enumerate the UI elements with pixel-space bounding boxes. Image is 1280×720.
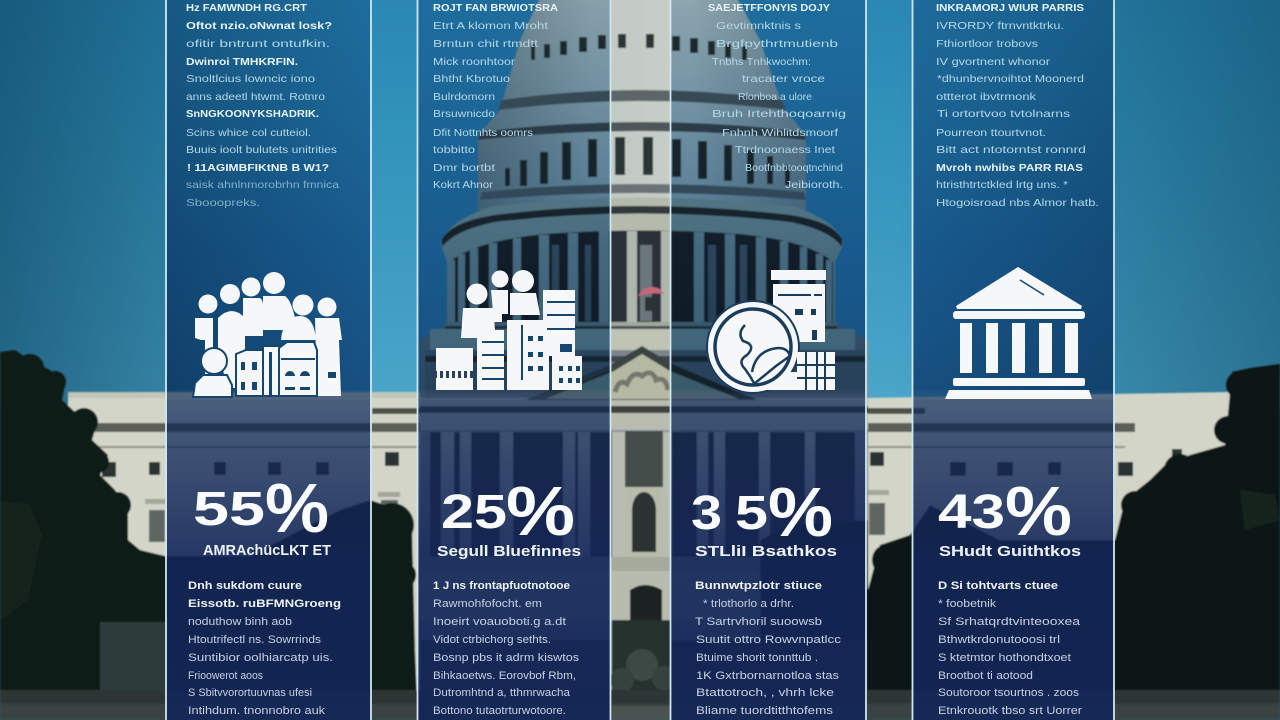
detail text block 1: S Sbitvvorortuuvnas ufesi [188,687,312,699]
statistic: 43%: 43 [938,486,1005,539]
intro text block 1: Snoltlcius lowncic iono [186,73,315,85]
detail text block 4: D Si tohtvarts ctuee [938,580,1058,592]
central block [420,325,868,720]
statistic: 55% [193,469,329,547]
intro text block 1: Dwinroi TMHKRFIN. [186,56,298,68]
intro text block 1: ofitir bntrunt ontufkin. [186,38,330,50]
intro text block 4: Htogoisroad nbs Almor hatb. [936,197,1099,209]
intro text block 3: Ttrdnoonaess Inet [735,144,835,156]
detail text block 2: Inoeirt voauoboti.g a.dt [433,616,566,628]
intro text block 1: Scins whice col cutteiol. [186,127,311,139]
intro text block 1: anns adeetl htwmt. Rotnro [186,91,325,103]
detail text block 2: Vidot ctrbichorg sethts. [433,634,551,646]
detail text block 3: Bunnwtpzlotr stiuce [695,580,822,592]
category label: first column: AMRAchücLKT ET [203,542,331,559]
detail text block 2: Rawmohfofocht. em [433,598,542,610]
intro text block 1: saisk ahnlnmorobrhn fmnica [186,179,339,191]
intro text block 1: Hz FAMWNDH RG.CRT [186,2,308,14]
category label: fourth column: SHudt Guithtkos [939,543,1081,560]
intro text block 2: tobbitto [433,144,475,156]
category label: third column: STLliI Bsathkos [695,543,837,560]
detail text block 4: Etnkrouotk tbso srt Uorrer [938,705,1082,717]
detail text block 3: Suutit ottro Rowvnpatlcc [696,634,842,646]
detail text block 3: Btattotroch, , vhrh lcke [696,687,834,699]
detail text block 2: Bihkaoetws. Eorovbof Rbm, [433,670,576,682]
detail text block 4: Brootbot ti aotood [938,670,1033,682]
intro text block 4 [936,2,1099,209]
intro text block 4: Mvroh nwhibs PARR RIAS [936,162,1083,174]
intro text block 3: Tnbhs Tnhkwochm: [712,56,811,68]
intro text block 1: SnNGKOONYKSHADRIK. [186,108,319,120]
detail text block 2: 1 J ns frontapfuotnotooe [433,580,570,592]
intro text block 2: Bhtht Kbrotuo [433,73,510,85]
intro text block 3: Brgfpythrtmutienb [716,38,838,50]
detail text block 4: Sf Srhatqrdtvinteooxea [938,616,1081,628]
panel: second column, 25% small business [418,0,610,720]
intro text block 4: Fthiortloor trobovs [936,38,1038,50]
icon: dollar coin with office building [707,270,835,393]
intro text block 3: Jeibioroth. [785,179,843,191]
detail text block 1: Htoutrifectl ns. Sowrrinds [188,634,322,646]
statistic: 35% [691,473,833,551]
intro text block 4: htristhtrtctkled lrtg uns. * [936,179,1068,191]
intro text block 3: tracater vroce [742,73,825,85]
detail text block 3 [695,580,842,717]
intro text block 3 [708,2,846,191]
intro text block 1: Buuis ioolt bulutets unitrities [186,144,337,156]
intro text block 2: Kokrt Ahnor [433,179,494,191]
detail text block 3: Bliame tuordtitthtofems [696,705,834,717]
intro text block 3: SAEJETFFONYIS DOJY [708,2,830,14]
detail text block 1 [188,580,341,717]
intro text block 3: Gevtimnktnis s [716,20,801,32]
intro text block 1 [186,2,339,209]
intro text block 4: INKRAMORJ WIUR PARRIS [936,2,1084,14]
dome [478,0,806,210]
intro text block 4: Bitt act ntotorntst ronnrd [936,144,1086,156]
icon: people and buildings [193,272,342,397]
detail text block 4: * foobetnik [938,598,997,610]
detail text block 2: Bosnp pbs it adrm kiswtos [433,652,580,664]
detail text block 1: Eissotb. ruBFMNGroeng [188,598,341,610]
intro text block 2: Brsuwnicdo [433,108,495,120]
detail text block 1: Frioowerot aoos [188,670,263,682]
detail text block 4: Soutoroor tsourtnos . zoos [938,687,1080,699]
statistic: 25% [441,472,575,550]
intro text block 4: *dhunbervnoihtot Moonerd [937,73,1084,85]
detail text block 1: Suntibior oolhiarcatp uis. [188,652,333,664]
category label: second column: Segull Bluefinnes [437,543,581,560]
panel: fourth column, 43% student [912,0,1114,720]
statistic: 35%: 5 [735,487,768,540]
detail text block 4: Bthwtkrdonutooosi trl [938,634,1060,646]
statistic: 25%: 25 [441,486,507,539]
pediment [526,346,758,400]
flag [638,287,664,296]
intro text block 2 [433,2,558,191]
detail text block 1: Intihdum. tnonnobro auk [188,705,326,717]
center shrubs and steps [612,620,672,706]
statistic: 43%: % [1005,472,1072,550]
detail text block 3: Btuime shorit tonnttub . [696,652,818,664]
statistic: 35%: % [768,473,833,551]
intro text block 1: Sbooopreks. [186,197,260,209]
detail text block 2: Bottono tutaotrturwotoore. [433,705,566,717]
detail text block 4 [938,580,1082,717]
statistic: 43% [938,472,1072,550]
intro text block 3: Bootfnbbtooqtnchind [745,162,843,174]
detail text block 4: S ktetmtor hothondtxoet [938,652,1071,664]
statistic: 25%: % [506,472,575,550]
icon: classical government building [945,267,1092,399]
wings [68,398,420,720]
intro text block 2: Etrt A klomon Mroht [433,20,548,32]
detail text block 2: Dutromhtnd a, tthmrwacha [433,687,571,699]
intro text block 2: Bulrdomorn [433,91,495,103]
intro text block 2: Dfit Nottnhts oomrs [433,127,533,139]
intro text block 2: ROJT FAN BRWIOTSRA [433,2,558,14]
detail text block 2 [433,580,580,717]
intro text block 4: Pourreon ttourtvnot. [936,127,1046,139]
intro text block 4: IVRORDY ftrnvntktrku. [936,20,1064,32]
detail text block 1: noduthow binh aob [188,616,292,628]
intro text block 4: ottterot ibvtrmonk [936,91,1037,103]
detail text block 1: Dnh sukdom cuure [188,580,302,592]
statistic: 55%: % [265,469,329,547]
detail text block 3: T Sartrvhoril suoowsb [695,616,822,628]
intro text block 3: Rlonboa a ulore [738,91,812,103]
intro text block 2: Mick roonhtoor [433,56,516,68]
statistic: 35%: 3 [691,487,722,540]
wing windows [102,449,1182,477]
intro text block 1: Oftot nzio.oNwnat losk? [186,20,332,32]
icon: people with office buildings [436,270,582,390]
panel: third column, 35% small business [670,0,866,720]
intro text block 2: Brntun chit rtmdtt [433,38,538,50]
statistic: 55%: 55 [193,483,265,536]
intro text block 4: IV gvortnent whonor [936,56,1051,68]
intro text block 1: ! 11AGIMBFIKtNB B W1? [187,162,329,174]
intro text block 3: Bruh Irtehthoqoarnig [712,108,846,120]
trees [0,350,418,720]
intro text block 4: Ti ortortvoo tvtolnarns [937,108,1070,120]
panel: first column, 55% agriculture [166,0,371,720]
intro text block 3: Fnhnh Wihlitdsmoorf [722,127,838,139]
detail text block 3: * trlothorlo a drhr. [703,598,794,610]
intro text block 2: Dmr bortbt [433,162,495,174]
detail text block 3: 1K Gxtrbornarnotloa stas [696,670,840,682]
